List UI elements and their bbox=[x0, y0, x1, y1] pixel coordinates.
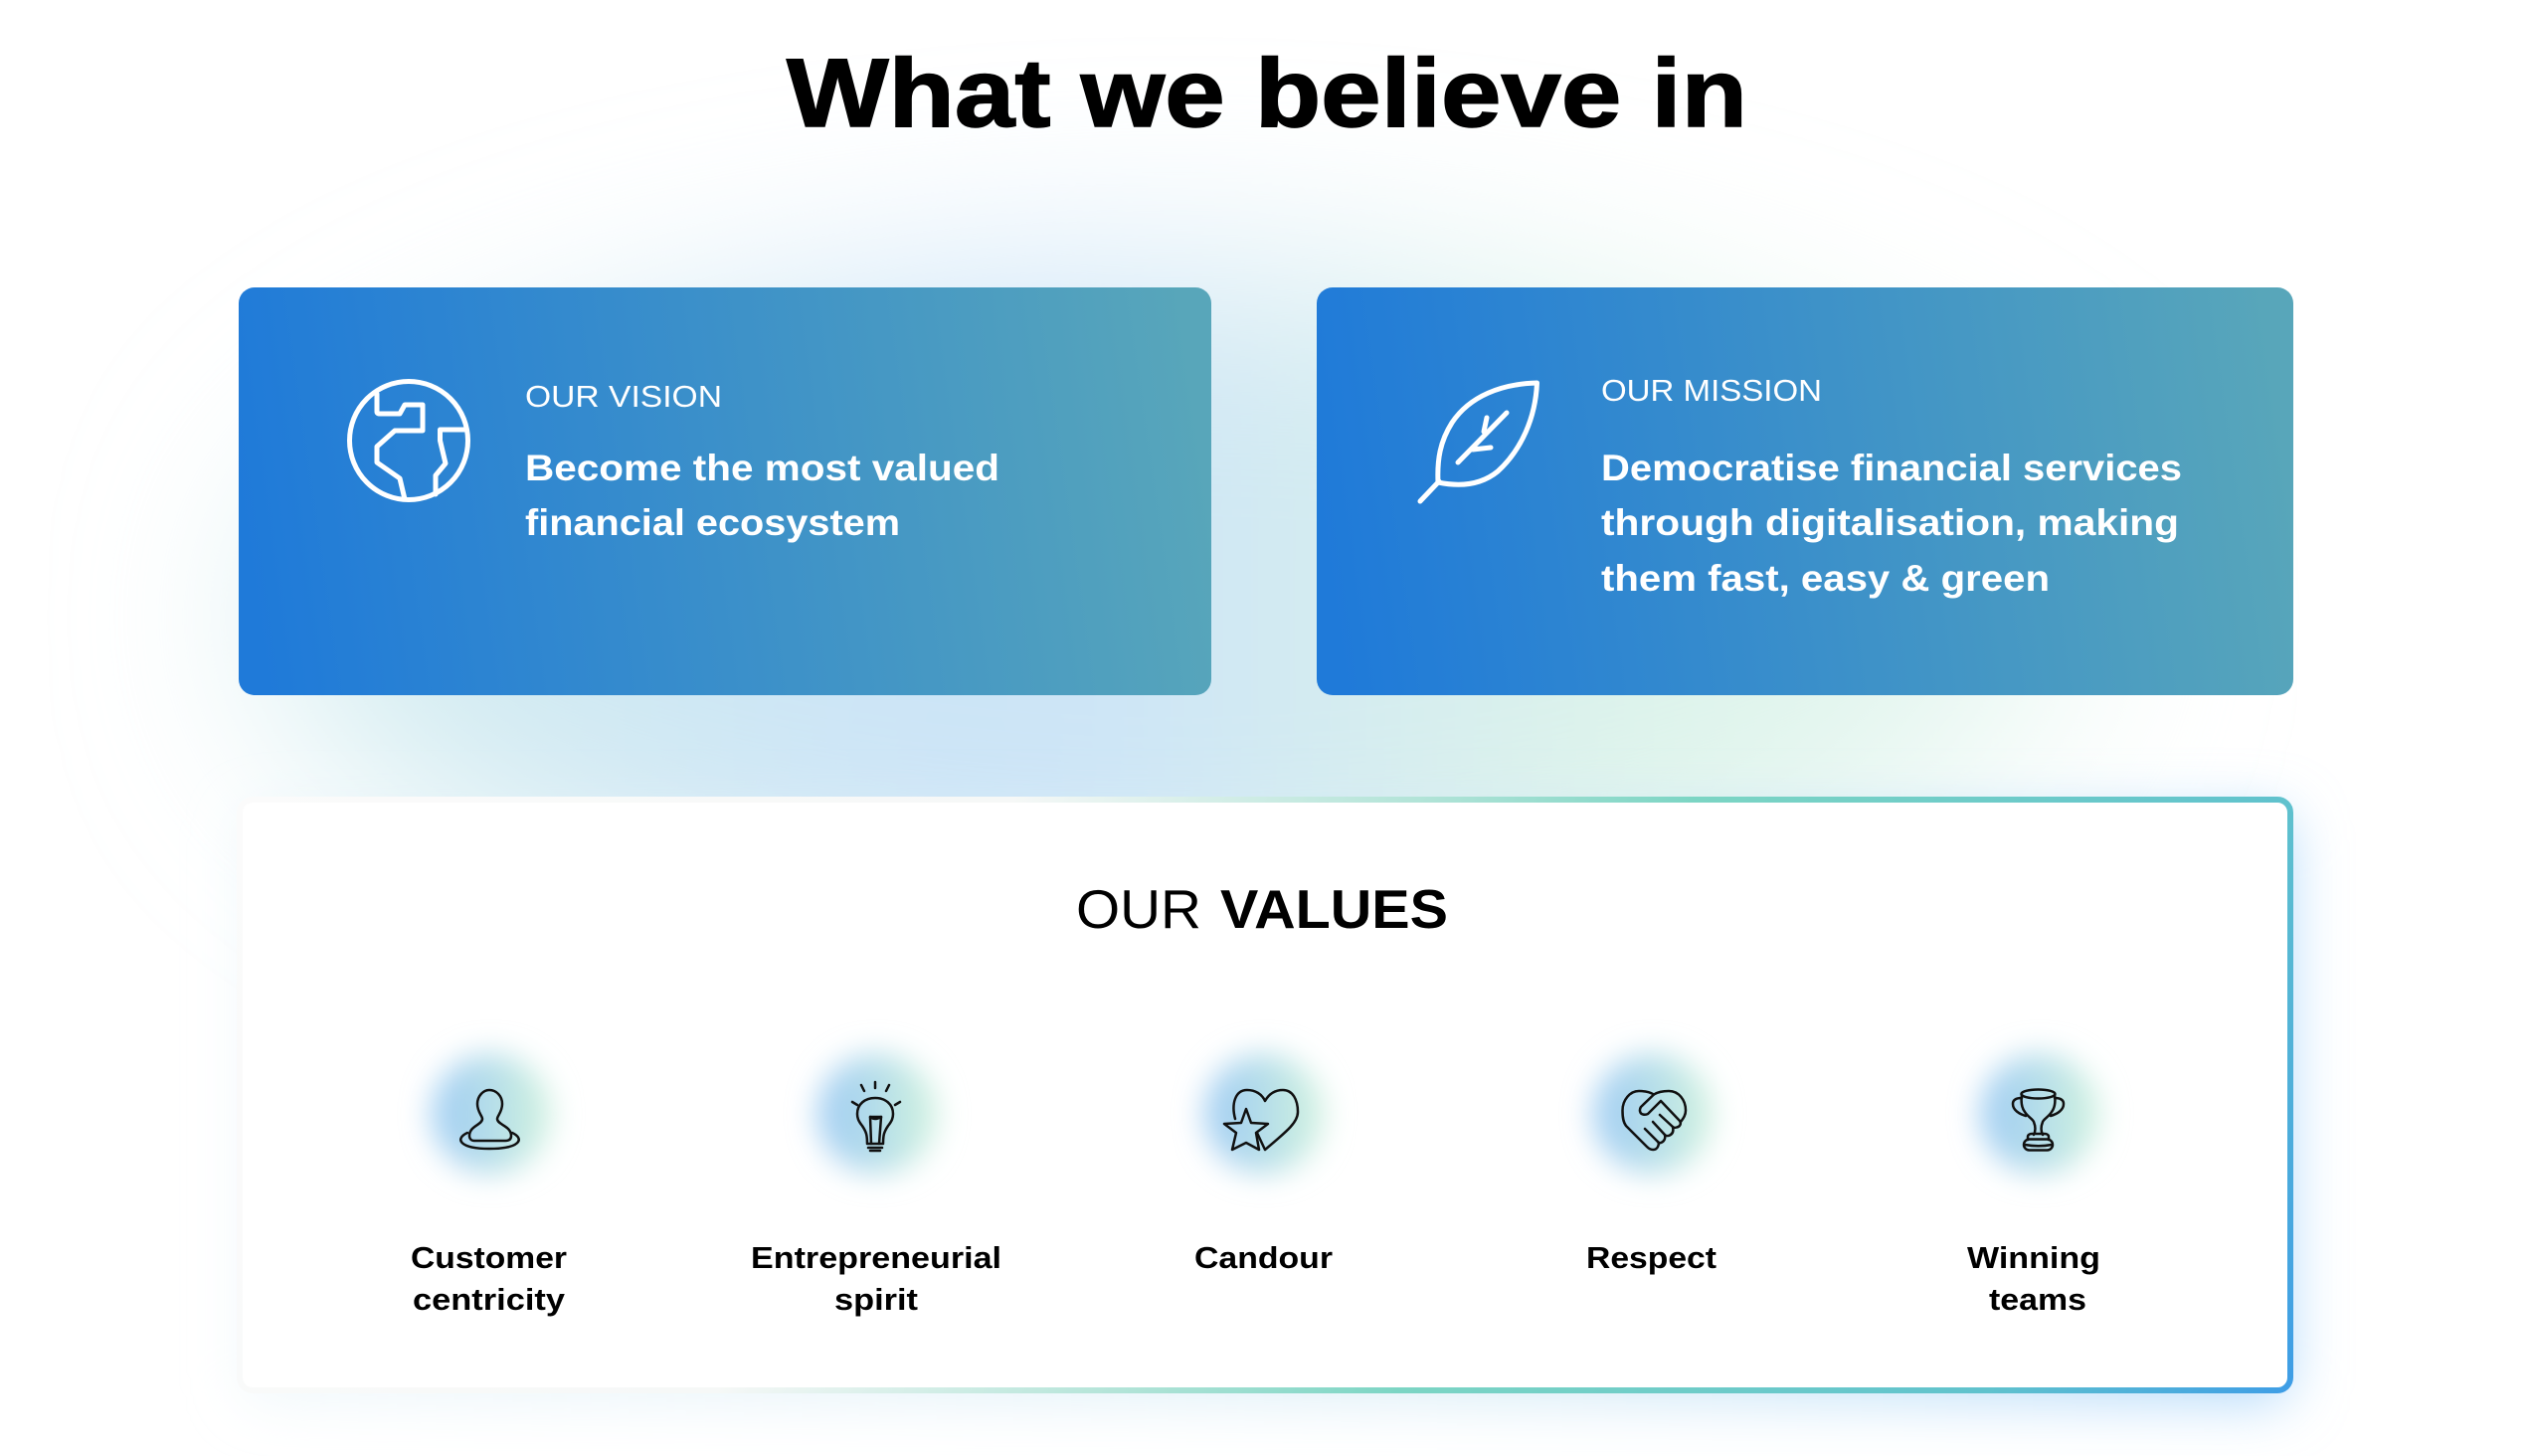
label: Entrepreneurial bbox=[751, 1240, 1001, 1275]
icon: heart and star bbox=[1224, 1090, 1298, 1150]
icon: globe bbox=[350, 382, 467, 499]
value: entrepreneurial spirit bbox=[751, 1054, 1001, 1317]
mission statement: Democratise financial services bbox=[1601, 448, 2182, 488]
label bbox=[411, 1240, 567, 1317]
label: Respect bbox=[1586, 1240, 1717, 1275]
values heading: OUR bbox=[1076, 878, 1201, 940]
value: candour bbox=[1194, 1054, 1333, 1275]
icon glow bbox=[1204, 1054, 1324, 1174]
label bbox=[751, 1240, 1001, 1317]
icon: leaf bbox=[1420, 383, 1537, 501]
icon glow bbox=[817, 1054, 937, 1174]
panel: our mission bbox=[1317, 287, 2293, 695]
icon: trophy bbox=[2013, 1090, 2064, 1150]
value: winning teams bbox=[1967, 1054, 2100, 1317]
vision heading: OUR VISION bbox=[525, 379, 722, 414]
icon: handshake heart bbox=[1623, 1091, 1686, 1150]
value: customer centricity bbox=[411, 1054, 567, 1317]
panel shadow bbox=[243, 814, 2289, 1402]
title: What we believe in bbox=[787, 39, 1747, 147]
icon: person bbox=[460, 1090, 519, 1149]
icon glow bbox=[1593, 1054, 1713, 1174]
background glow bbox=[269, 273, 2078, 960]
value: respect bbox=[1586, 1054, 1717, 1275]
mission statement: through digitalisation, making bbox=[1601, 502, 2179, 543]
label: Candour bbox=[1194, 1240, 1333, 1275]
panel: our vision bbox=[239, 287, 1211, 695]
mission statement: them fast, easy & green bbox=[1601, 558, 2050, 599]
mission heading: OUR MISSION bbox=[1601, 373, 1822, 408]
icon: light bulb bbox=[852, 1082, 900, 1151]
mission statement bbox=[1601, 448, 2182, 599]
icon glow bbox=[432, 1054, 551, 1174]
label: Winning bbox=[1967, 1240, 2100, 1275]
label: centricity bbox=[413, 1282, 566, 1317]
vision statement: Become the most valued bbox=[525, 448, 999, 488]
vision statement: financial ecosystem bbox=[525, 502, 900, 543]
values heading: VALUES bbox=[1220, 878, 1448, 940]
icon glow bbox=[1980, 1054, 2099, 1174]
vision statement bbox=[525, 448, 999, 543]
label: teams bbox=[1989, 1282, 2086, 1317]
label bbox=[1967, 1240, 2100, 1317]
label: spirit bbox=[834, 1282, 918, 1317]
label: Customer bbox=[411, 1240, 567, 1275]
panel: our values bbox=[240, 800, 2290, 1390]
